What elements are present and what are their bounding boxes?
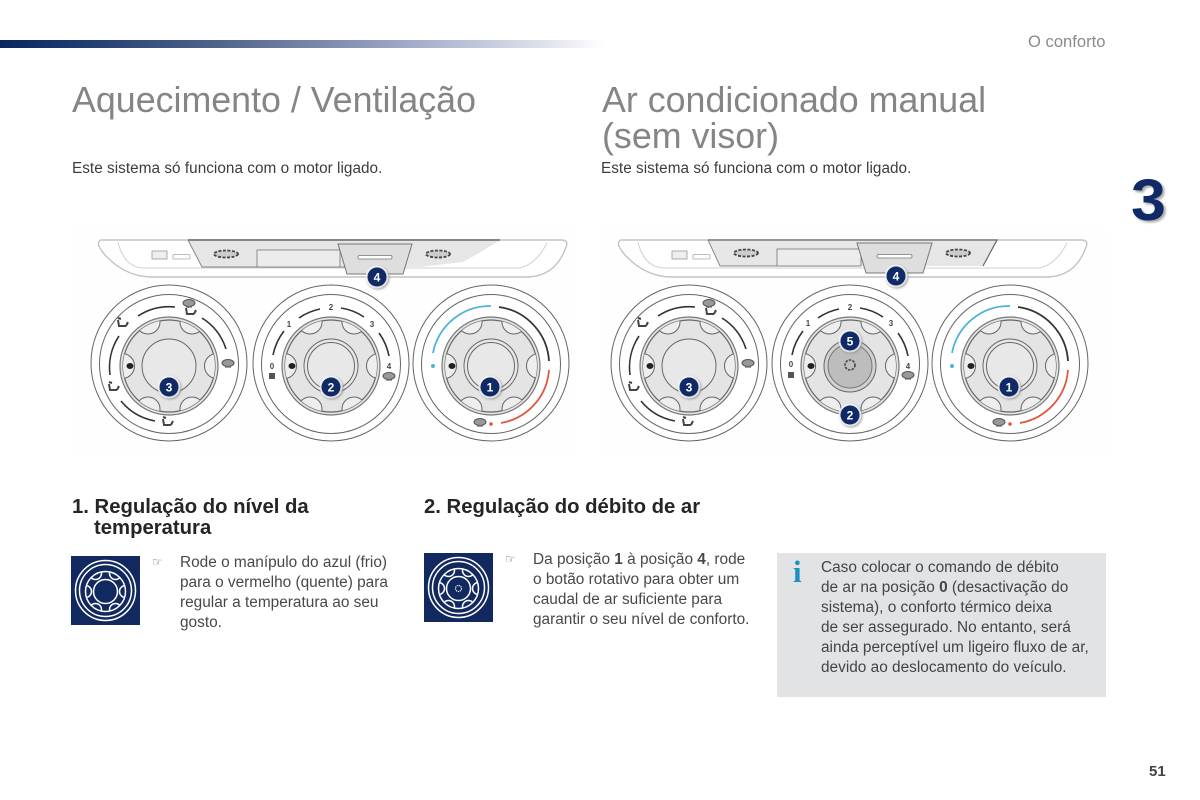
page number: 51 <box>1149 763 1166 780</box>
dial: air flow: 3 <box>370 320 375 329</box>
callout badges <box>158 266 502 398</box>
note text <box>821 559 1089 676</box>
heading 1 <box>72 496 309 539</box>
note text: de ser assegurado. No entanto, será <box>821 619 1071 636</box>
callout badges: 3 <box>686 380 693 394</box>
dial: air flow with A/C button: 1 <box>806 319 811 328</box>
heading 2: 2. Regulação do débito de ar <box>424 496 700 518</box>
icon: air flow dial thumbnail <box>424 553 493 622</box>
heading 1: 1. Regulação do nível da <box>72 496 309 518</box>
dial: air flow with A/C button: 3 <box>889 319 894 328</box>
callout badges: 1 <box>487 380 494 394</box>
dial: air flow: 2 <box>329 303 334 312</box>
instruction text 1: gosto. <box>180 614 222 631</box>
instruction text 1 <box>180 554 388 631</box>
dial: air distribution <box>91 285 247 441</box>
dial: temperature <box>932 285 1088 441</box>
icon: temperature dial thumbnail <box>71 556 140 625</box>
heading 1: temperatura <box>94 517 211 539</box>
title: heating: Aquecimento / Ventilação <box>72 80 476 120</box>
title: air conditioning: Ar condicionado manual <box>602 80 986 120</box>
callout badges: 4 <box>893 270 900 284</box>
title: air conditioning: (sem visor) <box>602 116 779 156</box>
instruction text 2: o botão rotativo para obter um <box>533 571 739 588</box>
instruction text 2: Da posição 1 à posição 4, rode <box>533 551 745 568</box>
dial: air flow: 0 <box>270 362 275 371</box>
dial: air flow with A/C button: 4 <box>906 362 911 371</box>
note text: ainda perceptível um ligeiro fluxo de ar, <box>821 639 1089 656</box>
instruction text 1: para o vermelho (quente) para <box>180 574 388 591</box>
callout badges <box>678 264 1020 426</box>
dashboard strip <box>98 240 567 277</box>
dashboard strip <box>618 240 1087 277</box>
title: air conditioning <box>602 80 986 156</box>
intro text left: Este sistema só funciona com o motor ligado. <box>72 160 382 177</box>
note text: de ar na posição 0 (desactivação do <box>821 579 1068 596</box>
icon: info: i <box>793 554 802 589</box>
bullet marker 1: ☞ <box>152 555 163 569</box>
dial: air flow <box>253 285 409 441</box>
instruction text 1: regular a temperatura ao seu <box>180 594 378 611</box>
section name: O conforto <box>1028 32 1105 51</box>
note text: sistema), o conforto térmico deixa <box>821 599 1052 616</box>
instruction text 2 <box>533 551 749 628</box>
note text: Caso colocar o comando de débito <box>821 559 1059 576</box>
chapter number: 3 <box>1131 168 1166 233</box>
dial: temperature <box>413 285 569 441</box>
bullet marker 2: ☞ <box>505 552 516 566</box>
callout badges: 4 <box>374 270 381 284</box>
dial: air flow with A/C button: 2 <box>848 303 853 312</box>
diagram: heating control panel <box>72 228 577 456</box>
top gradient bar <box>0 40 604 48</box>
intro text right: Este sistema só funciona com o motor ligado. <box>601 160 911 177</box>
callout badges: 5 <box>847 334 854 348</box>
info note panel <box>777 553 1106 697</box>
dial: air flow with A/C button: 0 <box>789 360 794 369</box>
dial: air flow with A/C button <box>772 285 928 441</box>
instruction text 2: caudal de ar suficiente para <box>533 591 722 608</box>
note text: devido ao deslocamento do veículo. <box>821 659 1067 676</box>
dial: air flow: 1 <box>287 320 292 329</box>
instruction text 1: Rode o manípulo do azul (frio) <box>180 554 387 571</box>
callout badges: 2 <box>328 380 335 394</box>
callout badges: 2 <box>847 408 854 422</box>
callout badges: 3 <box>166 380 173 394</box>
dial: air flow: 4 <box>387 362 392 371</box>
instruction text 2: garantir o seu nível de conforto. <box>533 611 749 628</box>
diagram: air conditioning control panel <box>602 228 1107 456</box>
callout badges: 1 <box>1006 380 1013 394</box>
dial: air distribution <box>611 285 767 441</box>
